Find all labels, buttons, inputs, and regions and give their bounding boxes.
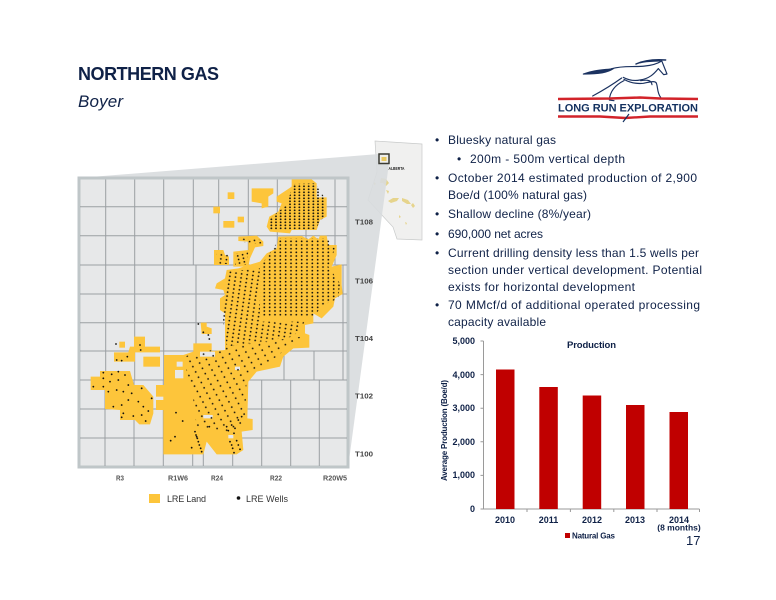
axes (480, 341, 700, 512)
bullet list: section under vertical development. Potential (448, 263, 702, 277)
range labels (116, 474, 347, 482)
map legend: LRE Land (167, 494, 206, 504)
gaps in land (156, 352, 240, 438)
y axis labels (452, 336, 475, 514)
inset map: Alberta (368, 141, 422, 240)
township labels: T108 (355, 218, 373, 226)
chart title: Production (567, 340, 616, 351)
bullet list: Boe/d (100% natural gas) (448, 188, 587, 202)
bullet list: • (435, 227, 439, 241)
x axis labels: 2013 (625, 515, 645, 525)
map panel: Boyer land and wells (79, 178, 374, 482)
y axis labels: 2,000 (452, 437, 475, 447)
bullet list: October 2014 estimated production of 2,900 (448, 171, 697, 185)
y axis labels: 5,000 (452, 336, 475, 346)
bars (496, 370, 688, 509)
x axis labels: 2014 (669, 515, 689, 525)
bullet list: exists for horizontal development (448, 280, 636, 294)
township labels: T100 (355, 450, 373, 458)
y axis labels: 1,000 (452, 470, 475, 480)
range labels: R20W5 (323, 474, 347, 482)
x axis labels: (8 months) (657, 522, 701, 532)
bullet list: Current drilling density less than 1.5 wells per (448, 246, 699, 260)
icon: running horse (583, 60, 667, 101)
bullet list: • (435, 207, 439, 221)
township labels: T102 (355, 392, 373, 400)
bullet list: • (435, 133, 439, 147)
LRE wells (93, 183, 340, 453)
bullet list: • (457, 152, 461, 166)
township labels: T106 (355, 276, 373, 286)
page number: 17 (686, 533, 700, 548)
range labels: R1W6 (168, 474, 188, 482)
bullet list (435, 133, 702, 329)
bullet list: • (435, 246, 439, 260)
bullet list: • (435, 171, 439, 185)
map legend: LRE Wells (246, 494, 288, 504)
bullet list: Shallow decline (8%/year) (448, 207, 591, 221)
bullet list: 690,000 net acres (448, 227, 543, 241)
x axis labels (495, 515, 701, 532)
title: NORTHERN GAS (78, 64, 219, 84)
bullet list: 200m - 500m vertical depth (470, 152, 625, 166)
map legend (149, 494, 288, 504)
zoom wedge (78, 154, 389, 468)
bullet list: • (435, 298, 439, 312)
bullet list: capacity available (448, 315, 546, 329)
bullet list: 70 MMcf/d of additional operated processing (448, 298, 700, 312)
logo wordmark: LONG RUN EXPLORATION (558, 102, 698, 114)
x axis labels: 2011 (539, 515, 558, 525)
logo: Long Run Exploration (558, 60, 698, 122)
range labels: R24 (211, 474, 224, 482)
subtitle: Boyer (78, 92, 124, 111)
map label: Alberta: ALBERTA (388, 166, 405, 171)
red stripes (558, 98, 698, 99)
chart legend (565, 533, 570, 538)
y axis labels: 4,000 (452, 370, 475, 380)
y axis title: Average Production (Boe/d) (440, 380, 449, 481)
bar chart: production: Natural Gas (572, 532, 616, 540)
township grid (79, 178, 348, 467)
range labels: R3 (116, 474, 124, 482)
bullet list: Bluesky natural gas (448, 133, 556, 147)
township labels (355, 218, 374, 458)
x axis labels: 2010 (495, 515, 515, 525)
x axis labels: 2012 (582, 515, 602, 525)
locator box (379, 154, 389, 164)
LRE land parcels (91, 179, 343, 454)
bar chart: production (440, 336, 701, 540)
y axis labels: 3,000 (452, 403, 475, 413)
township labels: T104 (355, 334, 374, 343)
range labels: R22 (270, 474, 282, 482)
y axis labels: 0 (470, 504, 475, 514)
